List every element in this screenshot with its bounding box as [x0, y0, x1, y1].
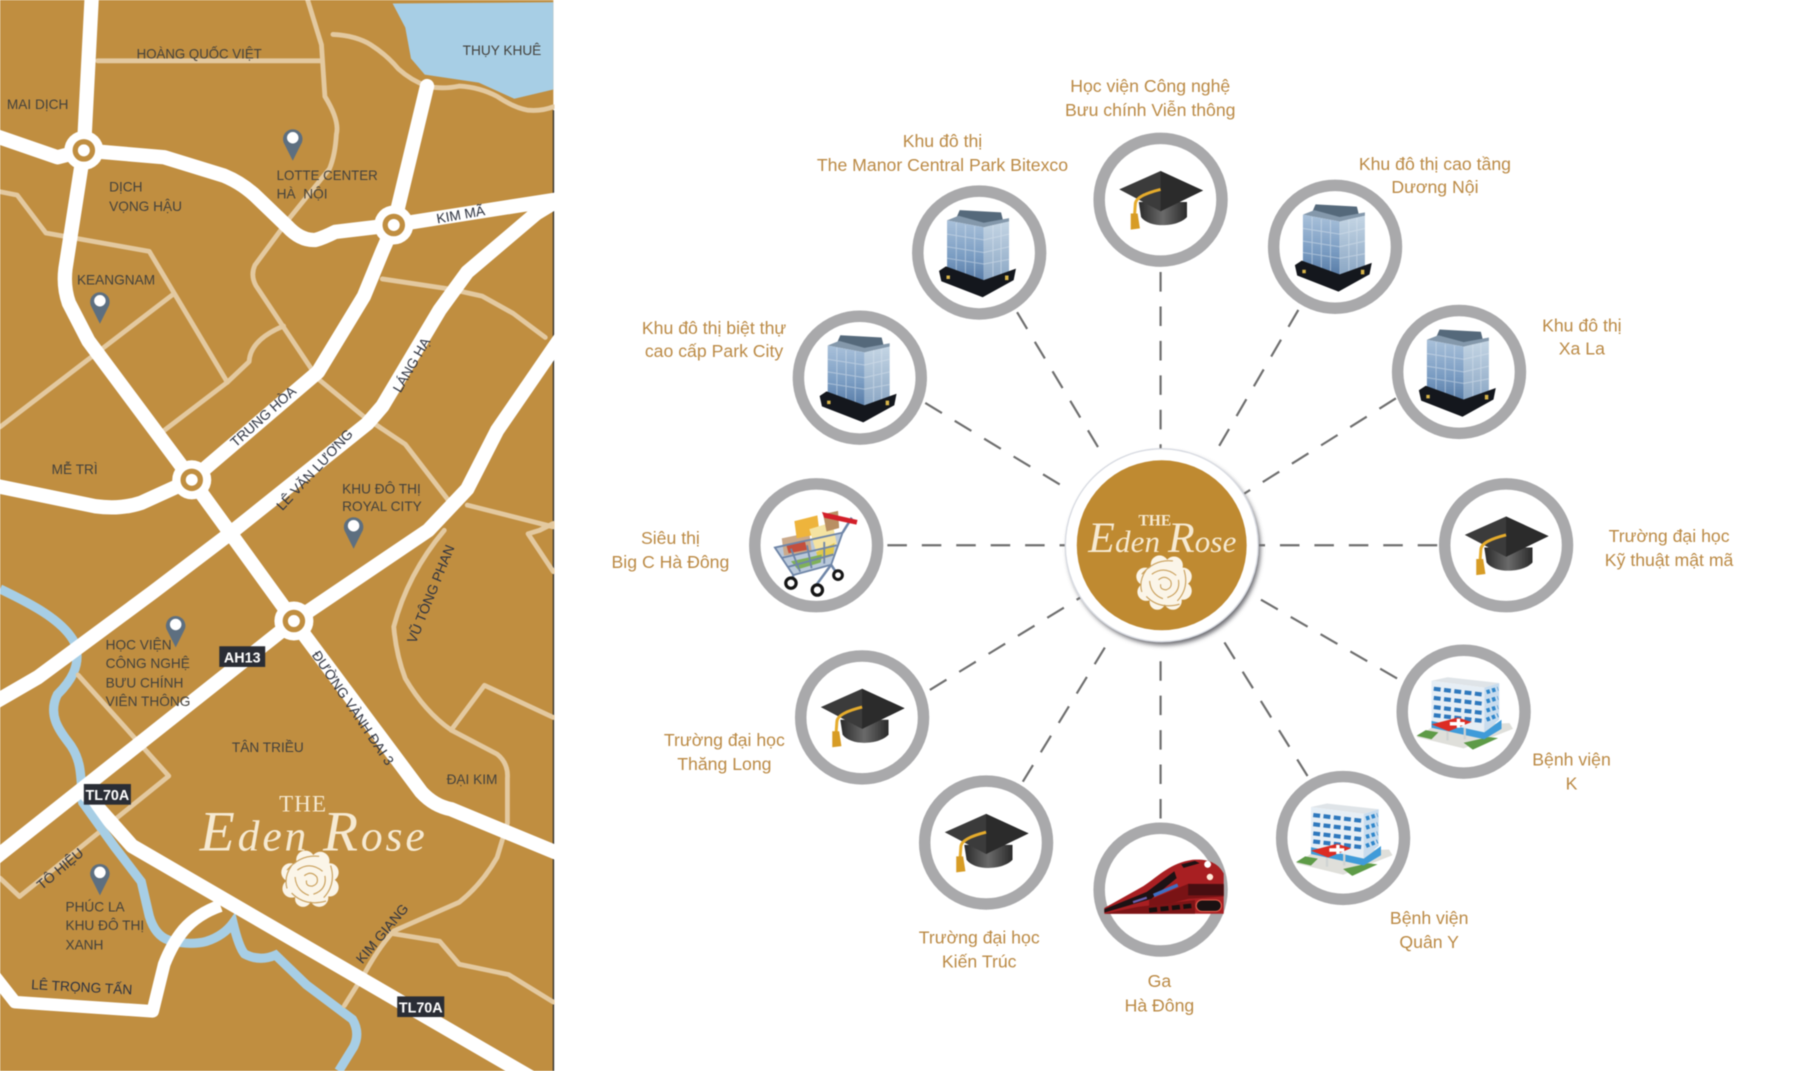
node: Kỹ thuật mật mã: Trường đại học [1609, 526, 1730, 546]
main roads [0, 0, 563, 1071]
water: lake [393, 2, 553, 99]
node: Dương Nội [1274, 154, 1511, 308]
map road names: VŨ TÔNG PHAN [403, 542, 457, 645]
map road names [31, 202, 487, 997]
node: Big C Hà Đông: Siêu thị [641, 528, 700, 548]
node: Bệnh viện K: K [1566, 774, 1578, 794]
road badges: TL70A [399, 1000, 443, 1016]
map pins [90, 129, 363, 895]
map place names: MAI DỊCH [7, 97, 68, 112]
map place names: VIÊN THÔNG [106, 694, 190, 709]
map logo: THE [279, 792, 327, 817]
node: Bệnh viện Quân Y: Quân Y [1399, 932, 1459, 952]
map place names: LOTTE CENTER [277, 168, 378, 183]
node: Học viện Công nghệ Bưu chính Viễn thông: Học viện Công nghệ [1070, 76, 1230, 96]
node: Bệnh viện K [1402, 650, 1611, 794]
map road names: KIM MÃ [435, 202, 487, 226]
map road names: ĐƯỜNG VÀNH ĐAI 3 [309, 648, 398, 768]
node: Xa La [1398, 311, 1622, 433]
node: Kiến Trúc: Kiến Trúc [942, 952, 1017, 972]
node: Xa La: Xa La [1559, 339, 1605, 359]
node: Big C Hà Đông [612, 484, 878, 607]
map place names: HOÀNG QUỐC VIỆT [137, 47, 262, 62]
roundabouts [64, 131, 413, 641]
node: Big C Hà Đông: Big C Hà Đông [612, 552, 729, 572]
map place names: HÀ NỘI [277, 187, 328, 202]
map road names: LÊ TRỌNG TẤN [31, 976, 133, 997]
map place names: XANH [65, 937, 103, 952]
center logo badge: Eden Rose [1087, 514, 1237, 562]
map road names: TRUNG HÒA [227, 382, 300, 450]
node: Kỹ thuật mật mã [1445, 484, 1734, 607]
minor roads [0, 0, 553, 1006]
node: Park City: cao cấp Park City [645, 341, 783, 361]
node: The Manor Central Park Bitexco: The Manor Central Park Bitexco [817, 155, 1068, 175]
map road names: LÊ VĂN LƯƠNG [273, 426, 356, 513]
map place names: DỊCH [109, 180, 142, 195]
node: Dương Nội: Dương Nội [1391, 177, 1479, 197]
node: Kiến Trúc: Trường đại học [919, 928, 1040, 948]
map place names: CÔNG NGHỆ [106, 656, 190, 671]
node: Thăng Long: Trường đại học [664, 730, 785, 750]
map place names: ĐẠI KIM [447, 772, 497, 787]
node: Bệnh viện Quân Y [1282, 777, 1468, 952]
road badges [84, 646, 444, 1017]
node: The Manor Central Park Bitexco [817, 131, 1068, 314]
map place names: ROYAL CITY [342, 499, 422, 514]
dashed connector lines [887, 272, 1437, 818]
node: Kiến Trúc [919, 781, 1048, 972]
node: Xa La: Khu đô thị [1542, 316, 1622, 336]
map logo [199, 792, 425, 907]
node: Ga Hà Đông: Ga [1148, 971, 1171, 991]
map place names: KEANGNAM [77, 273, 155, 288]
map road names: LÁNG HẠ [389, 334, 434, 395]
node: Ga Hà Đông [1099, 828, 1224, 1015]
map place names: PHÚC LA [65, 899, 126, 914]
node: Bệnh viện K: Bệnh viện [1532, 750, 1611, 770]
node: The Manor Central Park Bitexco: Khu đô thị [903, 131, 982, 151]
map place names [7, 43, 541, 952]
center logo badge [1065, 449, 1260, 645]
center logo badge: THE [1138, 513, 1171, 530]
node: Học viện Công nghệ Bưu chính Viễn thông [1065, 76, 1236, 261]
node: Park City [642, 316, 921, 439]
map place names: HỌC VIỆN [106, 638, 172, 653]
node: Thăng Long: Thăng Long [677, 754, 771, 774]
node: Bệnh viện Quân Y: Bệnh viện [1390, 908, 1468, 928]
map road names: KIM GIANG [353, 901, 411, 966]
node: Ga Hà Đông: Hà Đông [1125, 995, 1194, 1015]
icon: train [1104, 860, 1224, 914]
map place names: THỤY KHUÊ [463, 43, 541, 58]
map place names: KHU ĐÔ THỊ [342, 482, 421, 497]
map place names: MỄ TRÌ [52, 462, 98, 477]
map road names: TÔ HIỆU [33, 845, 86, 893]
water: river crossing bridge [83, 802, 107, 834]
map place names: VỌNG HẬU [109, 199, 182, 214]
panel: location map [0, 0, 563, 1071]
map place names: BƯU CHÍNH [106, 676, 183, 691]
icon: shopping cart [775, 511, 858, 595]
node: Dương Nội: Khu đô thị cao tầng [1359, 154, 1511, 174]
road badges: TL70A [85, 788, 129, 804]
map logo: Eden Rose [199, 801, 425, 864]
map place names: TÂN TRIỀU [232, 740, 304, 755]
map place names: KHU ĐÔ THỊ [65, 918, 144, 933]
node: Thăng Long [664, 656, 924, 779]
node: Học viện Công nghệ Bưu chính Viễn thông: Bưu chính Viễn thông [1065, 99, 1236, 120]
water: river [0, 589, 357, 1071]
node: Park City: Khu đô thị biệt thự [642, 318, 786, 338]
road badges: AH13 [224, 650, 261, 666]
node: Kỹ thuật mật mã: Kỹ thuật mật mã [1605, 550, 1734, 570]
